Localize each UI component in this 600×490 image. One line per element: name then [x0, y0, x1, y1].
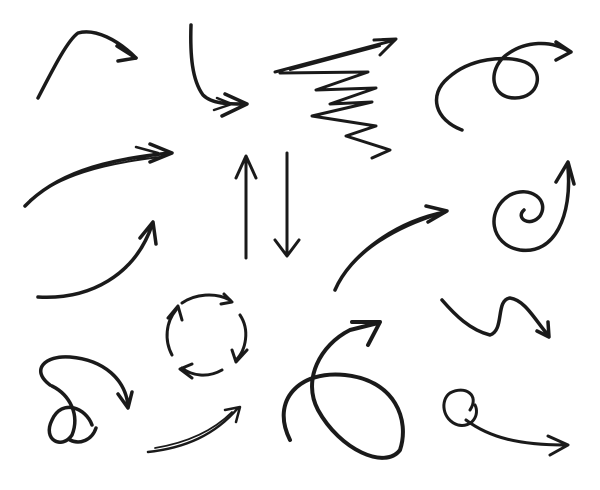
arrow: bent down-right: [191, 25, 247, 116]
arrow: lower-left curve: [38, 222, 156, 297]
arrow: S-curve: [442, 298, 549, 337]
arrow: bottom small curve: [148, 407, 240, 452]
arrow: right spiral: [494, 162, 574, 250]
arrow: top-right loop: [437, 42, 571, 130]
arrow: up: [236, 156, 256, 258]
arrow: middle-right curve: [335, 206, 447, 290]
arrow: top-left arc: [38, 32, 136, 98]
arrow: bottom-left loop: [41, 357, 132, 442]
arrow: big loop: [284, 322, 403, 458]
arrow: down: [275, 153, 299, 256]
arrow: circular cycle: [167, 294, 247, 378]
arrow: zigzag: [275, 39, 396, 158]
arrow: small circle to right: [444, 390, 568, 455]
arrow: long left curve: [25, 144, 172, 206]
